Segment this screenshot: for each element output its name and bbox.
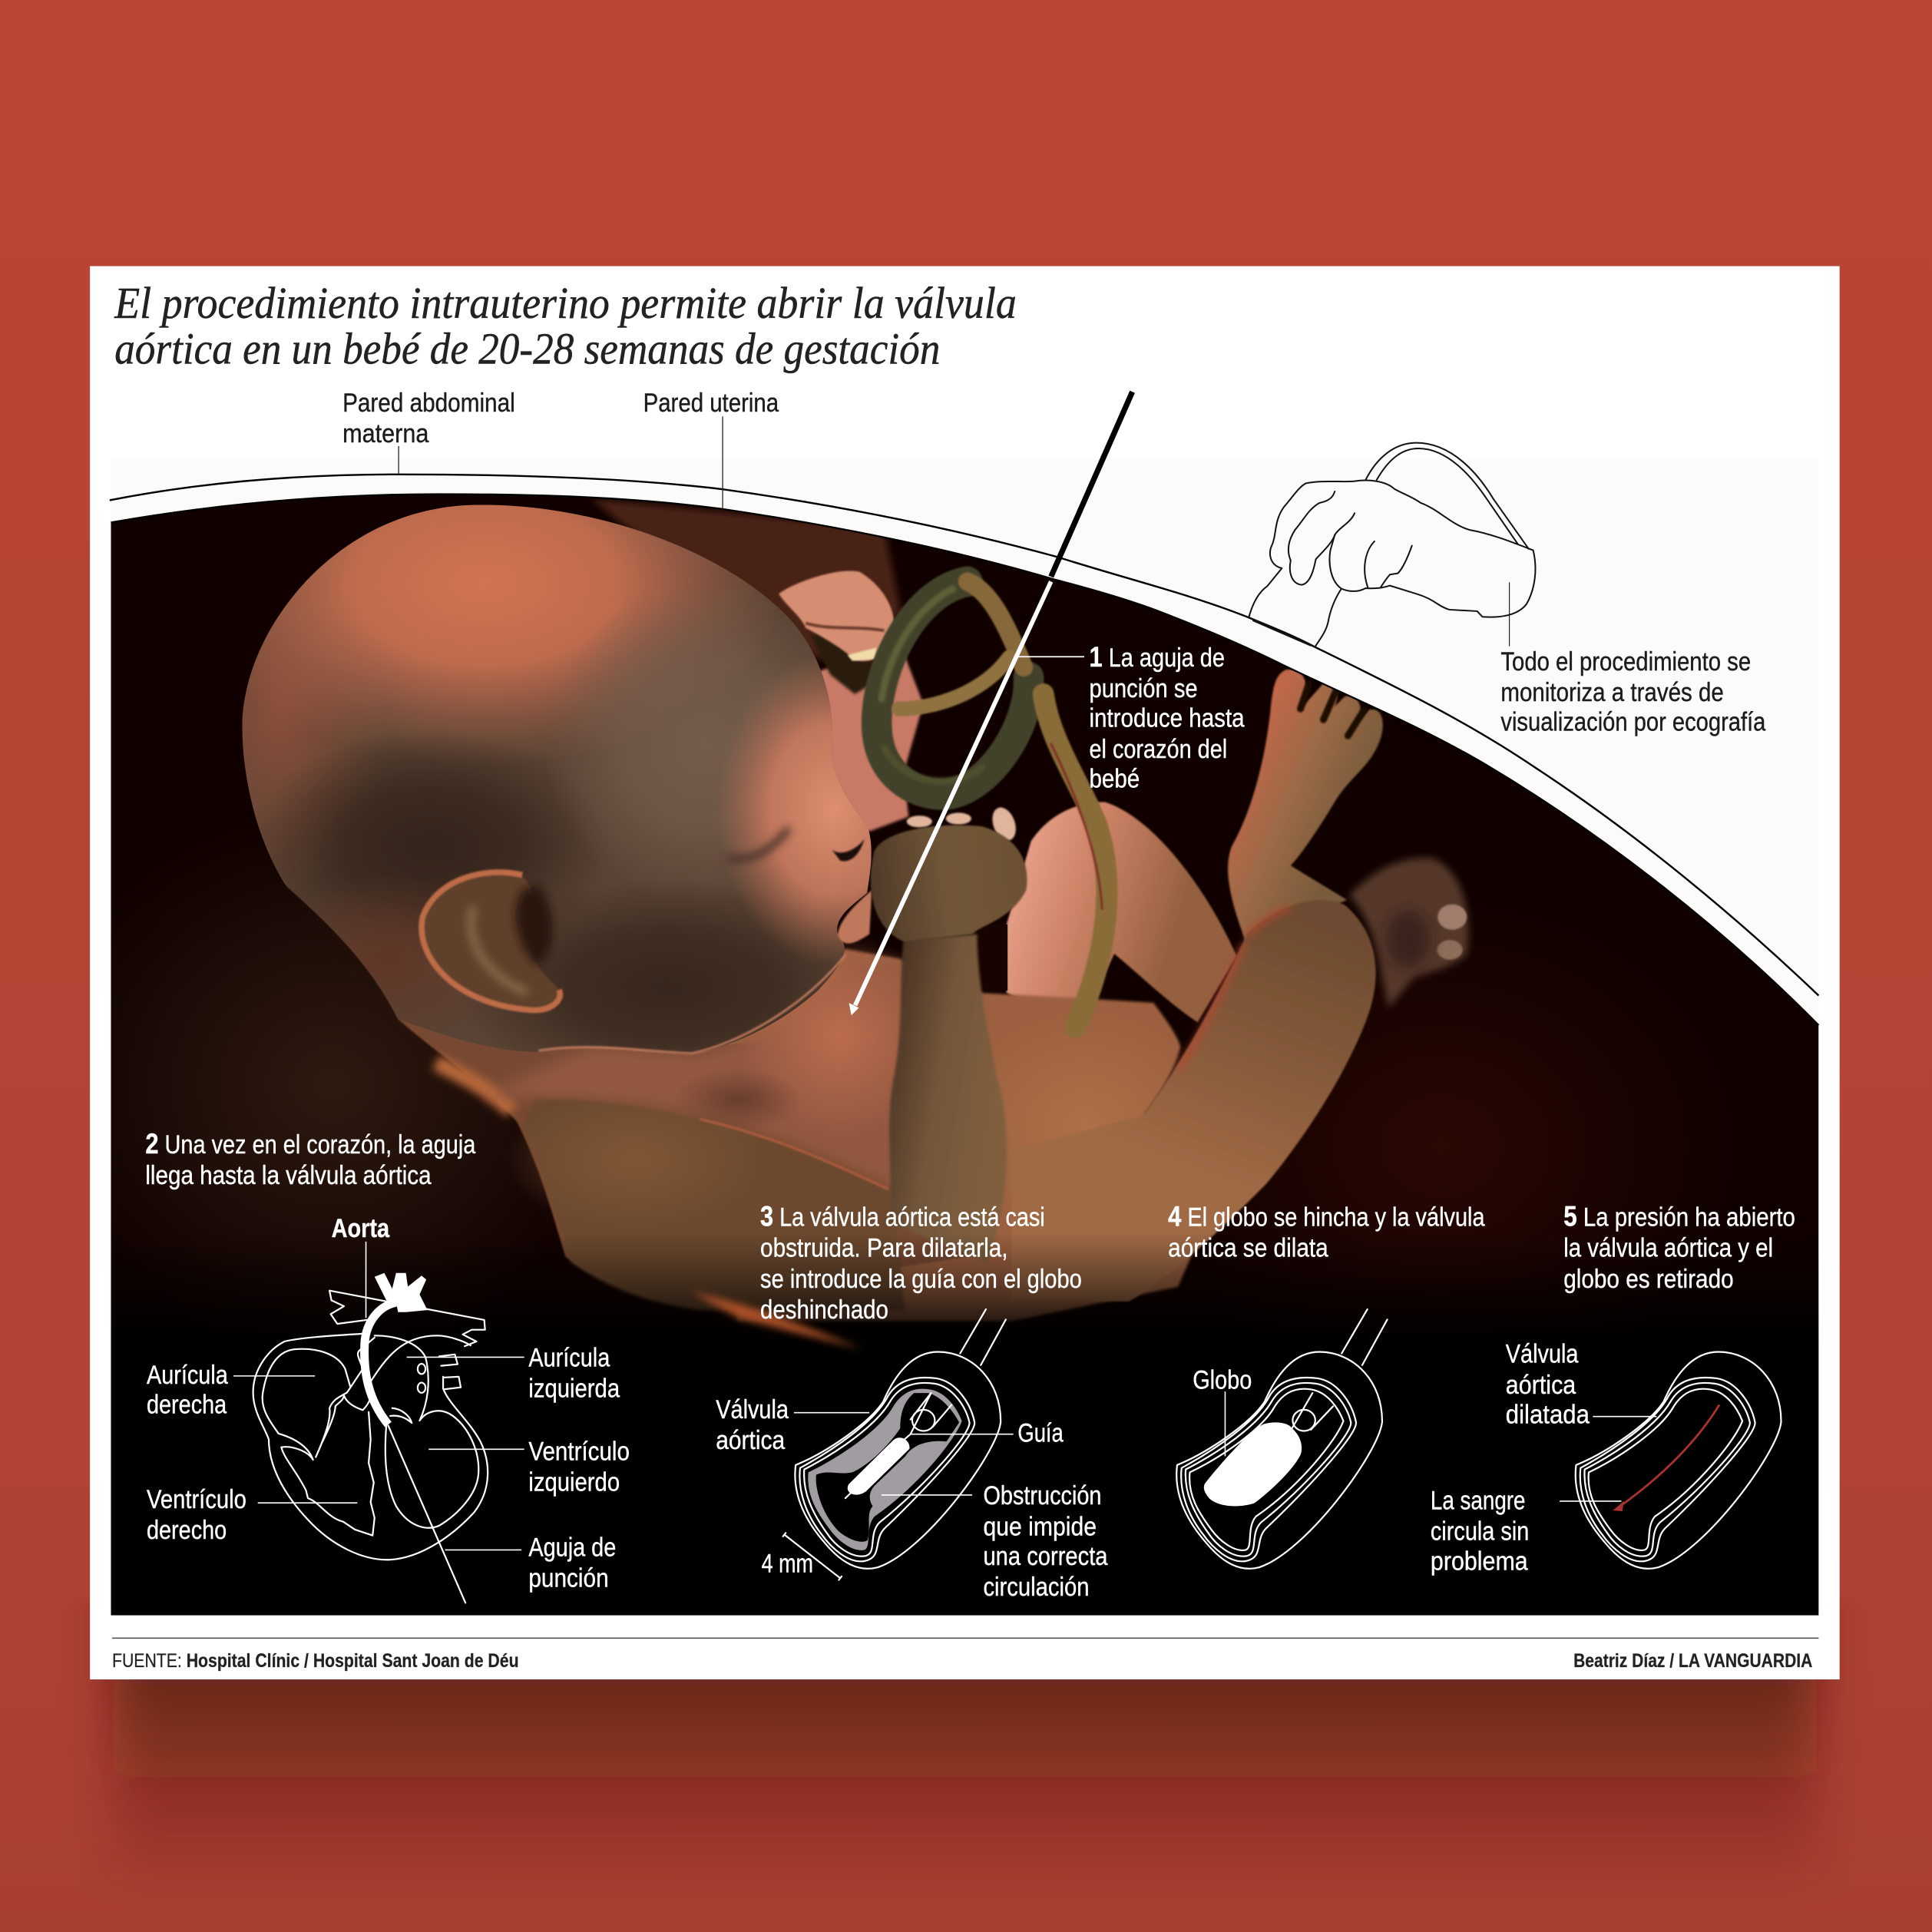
step 5 text: la válvula aórtica y el xyxy=(1563,1234,1773,1263)
jaw rim light xyxy=(538,954,845,1054)
rear body parts in second coordinate frame xyxy=(591,498,1468,1321)
right atrium and ventricle xyxy=(263,1349,375,1536)
thigh red rim xyxy=(1178,907,1291,1071)
belly highlight xyxy=(943,1007,1227,1242)
step 5 text: globo es retirado xyxy=(1563,1265,1734,1294)
labels: walls: materna xyxy=(342,419,429,448)
puncture needle xyxy=(389,1426,465,1603)
near foot and calf xyxy=(1228,670,1383,944)
valve diagram: obstructed xyxy=(783,1309,1014,1580)
skull left tone xyxy=(172,524,388,890)
step 2 text: llega hasta la válvula aórtica xyxy=(145,1161,432,1190)
callout: ultrasound monitoring: Todo el procedimiento se xyxy=(1500,647,1751,677)
finger tips xyxy=(907,804,1020,844)
mid skull grey xyxy=(544,583,867,906)
fist xyxy=(871,825,1027,941)
orange neck rim xyxy=(436,1063,511,1111)
valve labels: una correcta xyxy=(983,1542,1108,1571)
callout: ultrasound monitoring: monitoriza a través de xyxy=(1500,678,1724,707)
skull highlight xyxy=(183,400,786,766)
catheter xyxy=(960,1309,1006,1365)
vessel walls xyxy=(1176,1352,1382,1569)
heart labels: Ventrículo xyxy=(528,1437,630,1466)
callout: ultrasound monitoring xyxy=(1500,647,1766,737)
vein opening lower xyxy=(418,1383,425,1393)
cord red vein xyxy=(1050,743,1102,910)
vessel walls xyxy=(1576,1352,1781,1569)
leader lines xyxy=(794,1413,1014,1495)
uterine wall line xyxy=(111,494,1818,1025)
footer rule xyxy=(112,1638,1818,1639)
aorta branches xyxy=(375,1273,428,1312)
heart labels: Aurícula xyxy=(528,1343,610,1372)
dilated valve labels: Válvula xyxy=(1506,1340,1579,1369)
step 3 text: se introduce la guía con el globo xyxy=(760,1265,1082,1294)
black lower band xyxy=(111,1349,1818,1620)
face light xyxy=(716,653,953,965)
scale 4 mm xyxy=(783,1533,842,1580)
near arm and fist in second coordinate frame xyxy=(838,804,1027,1262)
valve diagram: dilated xyxy=(1560,1352,1781,1569)
upper arm xyxy=(522,1100,905,1310)
dilated valve labels: aórtica xyxy=(1506,1371,1576,1400)
source credit: FUENTE: Hospital Clínic / Hospital Sant Joan de Déu xyxy=(112,1650,519,1672)
chest shadow xyxy=(673,1068,802,1133)
labels: walls xyxy=(342,389,779,509)
eye xyxy=(832,839,865,861)
pulmonary veins xyxy=(439,1355,461,1389)
blood flow arrow xyxy=(1613,1404,1719,1511)
background glow left xyxy=(117,890,527,1264)
valve diagram: balloon inflated xyxy=(1176,1309,1388,1569)
leader lines xyxy=(233,1242,524,1550)
orange body streak xyxy=(693,1292,862,1349)
abdominal wall line xyxy=(110,475,1818,996)
hand behind head xyxy=(779,571,895,661)
background glow right xyxy=(1250,976,1646,1276)
title: aórtica en un bebé de 20-28 semanas de gestación xyxy=(114,325,940,373)
title: El procedimiento intrauterino permite abrir la válvula xyxy=(114,280,1017,328)
heart labels xyxy=(147,1214,630,1593)
womb dark background xyxy=(111,481,1818,1620)
step 5 text: 5 La presión ha abierto xyxy=(1563,1201,1795,1232)
main illustration: fetus in womb xyxy=(111,495,1818,1616)
catheter xyxy=(1341,1309,1388,1365)
guide tube xyxy=(845,1393,951,1498)
heart labels: izquierda xyxy=(528,1375,620,1404)
step 1 text: bebé xyxy=(1089,764,1140,793)
near arm xyxy=(889,935,1007,1262)
step 5 text xyxy=(1563,1201,1795,1294)
guide circle xyxy=(912,1410,935,1431)
dilated valve labels: circula sin xyxy=(1431,1517,1529,1547)
valve labels: 4 mm xyxy=(762,1549,813,1578)
heart labels: Aorta xyxy=(332,1214,390,1243)
step 2 text: 2 Una vez en el corazón, la aguja xyxy=(145,1128,476,1160)
guide circle xyxy=(1292,1410,1315,1431)
needle xyxy=(849,392,1133,1015)
heart labels: izquierdo xyxy=(528,1468,620,1497)
dark gap beside arm xyxy=(978,925,1007,991)
torso xyxy=(723,948,1195,1322)
step 3 text: obstruida. Para dilatarla, xyxy=(760,1234,1008,1263)
step 1 text: el corazón del xyxy=(1089,735,1227,764)
uterine backdrop xyxy=(591,498,901,660)
neck and head in first coordinate frame xyxy=(172,400,969,1310)
aorta arch xyxy=(365,1302,396,1424)
step 4 text: aórtica se dilata xyxy=(1168,1234,1328,1263)
head base xyxy=(215,491,888,1063)
step 3 text: deshinchado xyxy=(760,1295,888,1325)
heart labels: Ventrículo xyxy=(147,1485,246,1514)
heart labels: derecho xyxy=(147,1516,227,1545)
callout: ultrasound monitoring: visualización por ecografía xyxy=(1500,708,1766,737)
deflated balloon xyxy=(848,1437,909,1495)
valve labels: que impide xyxy=(983,1512,1097,1541)
head xyxy=(172,400,953,1095)
tricuspid valve xyxy=(316,1338,375,1457)
labels: walls: Pared abdominal xyxy=(342,389,515,418)
near thigh xyxy=(1011,900,1376,1302)
neck and back xyxy=(286,885,969,1297)
guide tube xyxy=(1292,1393,1333,1430)
step 1 text: introduce hasta xyxy=(1089,704,1245,733)
nape tone xyxy=(269,874,506,1047)
ear xyxy=(422,872,560,1011)
card shadow xyxy=(114,1602,1816,1904)
far foot xyxy=(1349,858,1468,1007)
step 1 text: punción se xyxy=(1089,674,1198,703)
balloon leader xyxy=(1224,1391,1226,1456)
chest highlight xyxy=(738,933,942,1138)
heart labels: Aguja de xyxy=(528,1533,616,1563)
step 2 text xyxy=(145,1128,476,1190)
pulmonary arteries xyxy=(329,1291,485,1346)
grey obstruction xyxy=(808,1389,962,1550)
thumb and lips xyxy=(838,890,872,944)
author credit: Beatriz Díaz / LA VANGUARDIA xyxy=(1573,1650,1812,1672)
valve labels: Guía xyxy=(1017,1418,1064,1447)
valve labels: Válvula xyxy=(716,1395,789,1424)
heart labels: punción xyxy=(528,1564,609,1593)
valve labels: circulación xyxy=(983,1573,1089,1602)
dark hollow under hand xyxy=(811,630,879,694)
heart labels: derecha xyxy=(147,1390,227,1419)
valve labels xyxy=(716,1395,1108,1602)
umbilical cord loop xyxy=(877,581,1029,795)
jaw shadow xyxy=(452,879,883,1095)
bottom fade to black xyxy=(111,1232,1818,1349)
icon: hand with ultrasound probe xyxy=(1249,443,1535,647)
heart outline xyxy=(253,1334,488,1560)
balloon label: Globo xyxy=(1193,1365,1252,1394)
labels: walls: Pared uterina xyxy=(643,389,779,418)
step 1 text xyxy=(1014,641,1245,793)
step 3 text: 3 La válvula aórtica está casi xyxy=(760,1201,1045,1232)
pale abdominal background xyxy=(111,460,1818,1039)
vessel walls xyxy=(795,1352,1001,1569)
leader lines xyxy=(1560,1417,1656,1501)
chest xyxy=(485,960,915,1192)
far thigh and belly xyxy=(1007,802,1237,1027)
step 4 text xyxy=(1168,1201,1485,1263)
left atrium xyxy=(369,1335,471,1384)
step 3 text xyxy=(760,1201,1082,1325)
vein opening upper xyxy=(418,1364,425,1374)
toe gaps xyxy=(1301,684,1364,736)
step 4 text: 4 El globo se hincha y la válvula xyxy=(1168,1201,1485,1232)
dilated valve labels xyxy=(1431,1340,1590,1576)
step 1 text: 1 La aguja de xyxy=(1089,641,1225,673)
valve labels: aórtica xyxy=(716,1426,786,1455)
title xyxy=(114,280,1017,373)
dilated valve labels: problema xyxy=(1431,1547,1528,1576)
left ventricle xyxy=(375,1335,478,1528)
dark temple xyxy=(247,729,614,965)
heart labels: Aurícula xyxy=(147,1361,229,1390)
heart diagram xyxy=(233,1242,524,1603)
brow crease xyxy=(727,829,789,859)
panel: white card xyxy=(90,266,1840,1679)
cord strand falling xyxy=(1044,694,1107,1027)
dilated valve labels: La sangre xyxy=(1431,1487,1525,1516)
arm top rim xyxy=(700,1119,888,1189)
arm highlight xyxy=(506,1090,765,1229)
valve labels: Obstrucción xyxy=(983,1481,1102,1510)
open channel xyxy=(816,1393,959,1542)
pink cheek area xyxy=(820,657,923,833)
dilated valve labels: dilatada xyxy=(1506,1400,1590,1429)
inflated balloon xyxy=(1204,1422,1302,1506)
aortic flap xyxy=(390,1408,412,1423)
